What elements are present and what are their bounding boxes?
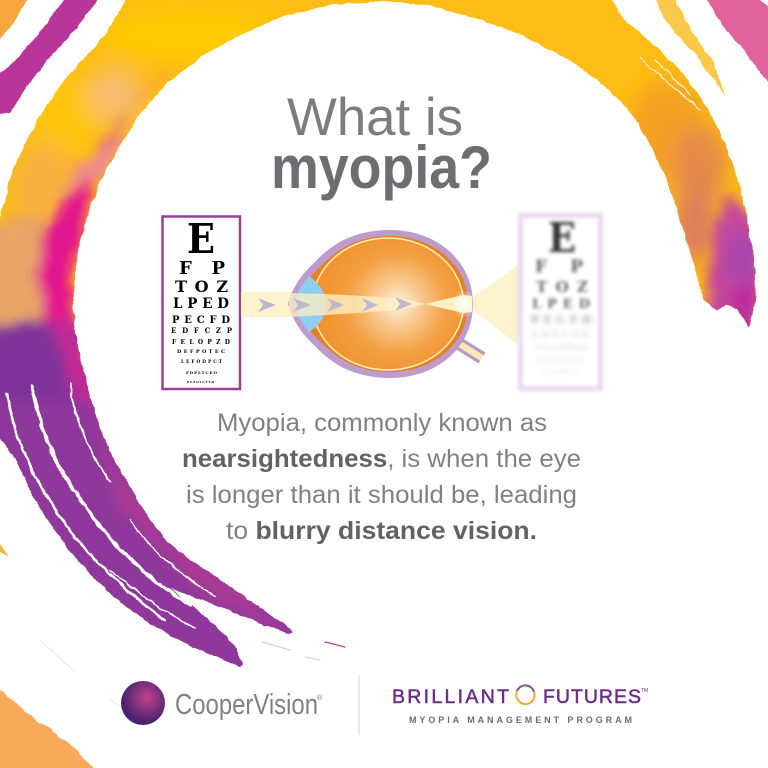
divider — [358, 675, 360, 735]
light cone to blurred chart — [473, 265, 518, 345]
eye chart: blurred: L P E D — [532, 297, 590, 312]
eye chart: sharp: L P E D — [173, 296, 229, 312]
Brilliant Futures logo — [392, 685, 648, 725]
eye chart: blurred: T O Z — [536, 278, 588, 296]
eye chart: blurred: D E F P O T E C — [537, 358, 583, 364]
title — [271, 88, 492, 201]
eye chart: sharp — [162, 215, 240, 389]
eye chart: blurred: E — [548, 214, 576, 262]
logo orb — [121, 681, 165, 725]
body text: to blurry distance vision. — [226, 517, 537, 545]
CooperVision logo — [121, 681, 323, 725]
body text: Myopia, commonly known as — [217, 409, 547, 437]
body text: is longer than it should be, leading — [186, 481, 577, 509]
small yellow fleck — [0, 544, 9, 557]
light beam entering eye — [241, 292, 296, 317]
brush stroke: bottom-left orange sweep — [0, 682, 103, 768]
body text: nearsightedness , is when the eye — [182, 445, 581, 473]
brush stroke: top-left orange corner — [0, 0, 32, 50]
wordmark: CooperVision — [175, 689, 318, 721]
focused beam — [289, 293, 425, 317]
Brilliant Futures logo: TM — [641, 688, 648, 694]
Brilliant Futures logo: MYOPIA MANAGEMENT PROGRAM — [409, 715, 632, 725]
focal glow — [452, 290, 476, 318]
eye chart: sharp: F E L O P Z D — [172, 339, 230, 346]
eye chart: sharp: D E F P O T E C — [177, 349, 225, 355]
CooperVision logo: ® — [317, 694, 323, 702]
eye chart: blurred: E D F C Z P — [532, 330, 589, 339]
brush stroke: top-right pink band — [701, 0, 768, 95]
brush stroke: thin yellow streak — [651, 0, 726, 97]
vitreous body — [312, 238, 464, 370]
eye chart: sharp: P E C F D — [172, 315, 230, 326]
tail flecks — [40, 640, 345, 706]
eye chart: sharp: F P — [179, 258, 225, 279]
title: What is — [287, 88, 463, 147]
Brilliant Futures logo: BRILLIANT — [392, 686, 509, 708]
lens — [294, 276, 326, 332]
eye chart: sharp: L E F O D P C T — [181, 359, 223, 365]
eye chart: sharp: E — [187, 215, 215, 263]
gap between tail strands — [170, 588, 305, 690]
brush stroke: top-left magenta band — [0, 0, 104, 116]
body text — [182, 409, 581, 545]
eye chart: blurred: P E C F D — [531, 315, 591, 326]
arrows along light path — [258, 297, 412, 312]
eye chart: blurred — [520, 214, 600, 388]
eye chart: sharp: PEZOLCFTD — [187, 380, 214, 384]
Brilliant Futures logo: FUTURES — [543, 686, 641, 708]
eye chart: blurred: L E F O D P C T — [542, 369, 579, 375]
eye cross-section — [288, 230, 476, 378]
eye chart: sharp: E D F C Z P — [171, 326, 233, 335]
sclera — [288, 230, 473, 378]
eye chart: blurred: F E L O P Z D — [535, 345, 587, 352]
optic nerve — [450, 338, 482, 358]
eye chart: blurred: F P — [535, 257, 583, 277]
white bristle gaps in tail — [7, 58, 700, 628]
choroid ring — [296, 236, 468, 372]
ring icon — [516, 685, 535, 704]
title: myopia? — [271, 134, 492, 201]
eye chart: sharp: FDPLTCEO — [186, 370, 218, 375]
eye chart: sharp: T O Z — [175, 277, 228, 296]
